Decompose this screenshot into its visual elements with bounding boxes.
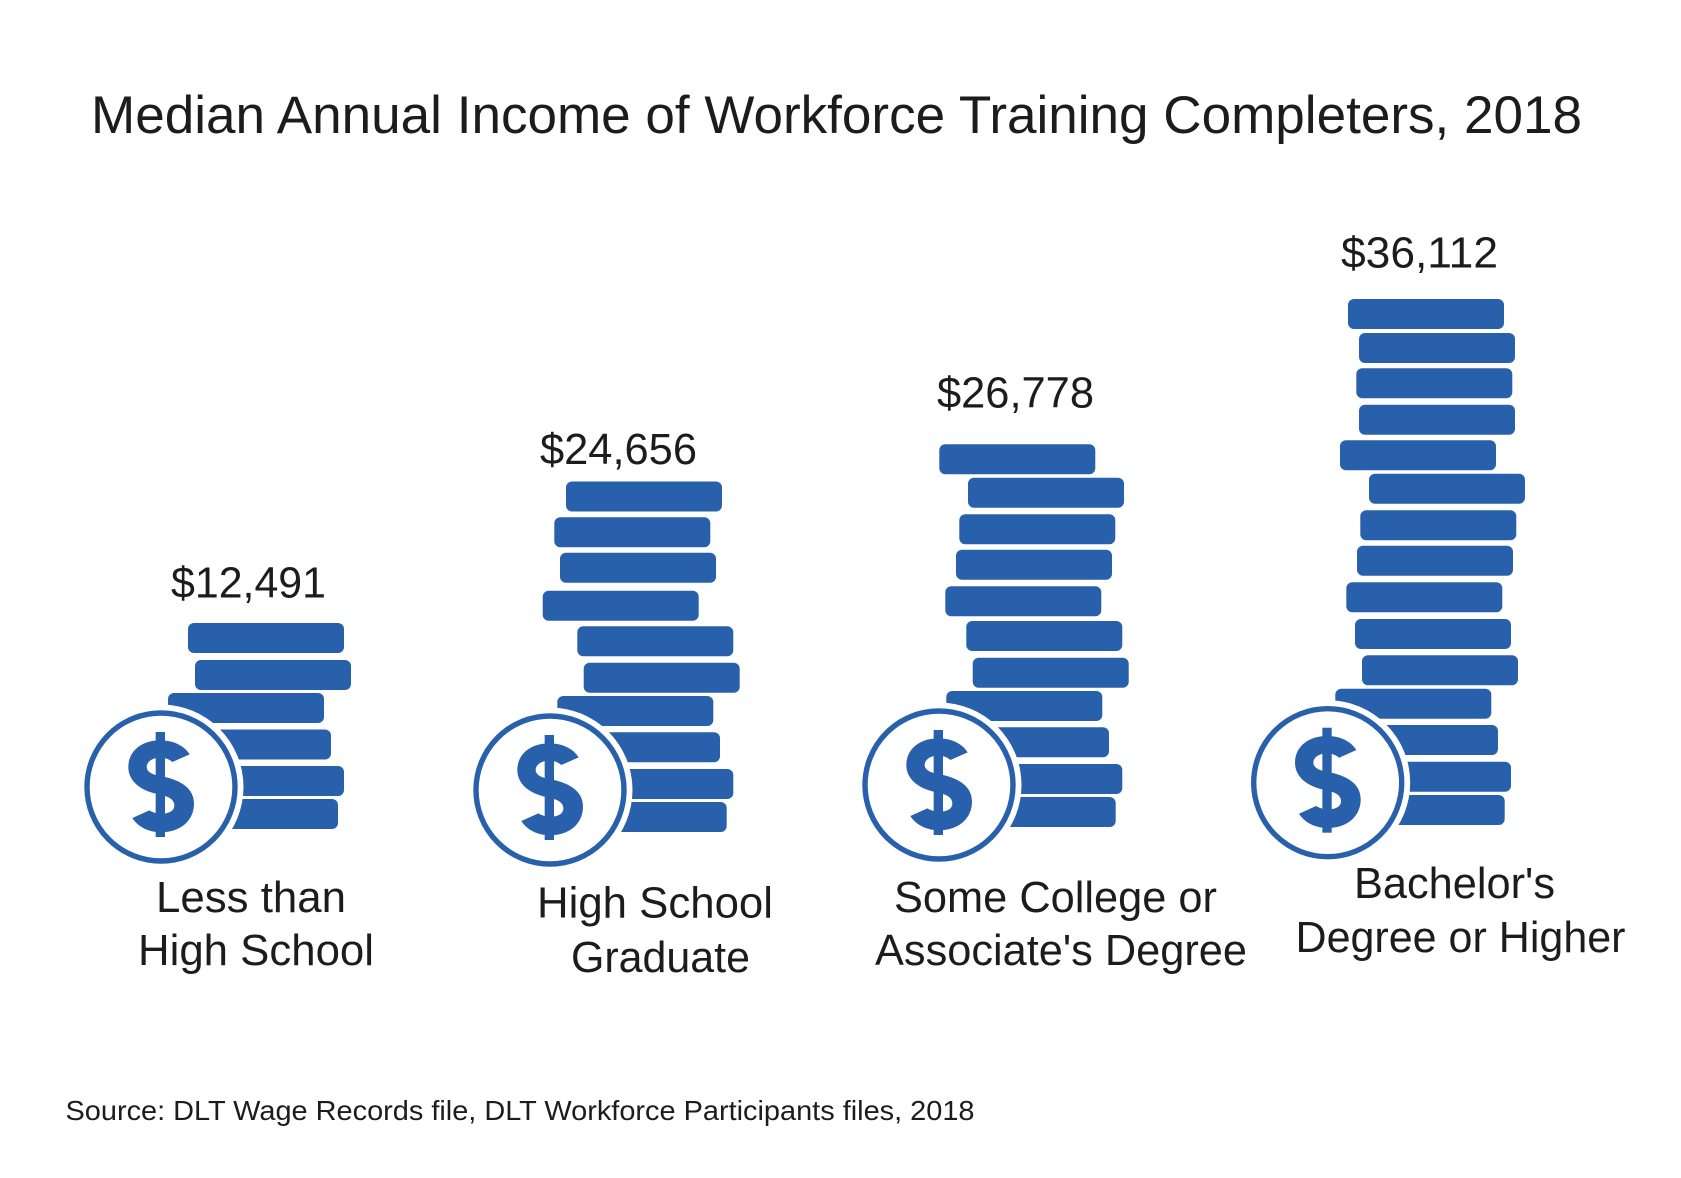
label: some college or associate's degree: Associate's Degree: [875, 926, 1247, 975]
value: $12,491: $12,491: [171, 558, 326, 608]
column: bachelor's degree or higher: [1245, 228, 1626, 962]
value: $26,778: $26,778: [937, 368, 1094, 418]
column: high school graduate: [468, 425, 773, 982]
icon: dollar coin: [856, 702, 1022, 868]
coin stack: [939, 444, 1129, 827]
label: less than high school: Less than: [156, 873, 346, 922]
label: bachelor's degree or higher: Degree or Higher: [1296, 913, 1626, 962]
icon: dollar coin: [78, 704, 244, 870]
label: bachelor's degree or higher: [1296, 859, 1626, 962]
coin stack: [168, 623, 351, 829]
label: high school graduate: High School: [537, 878, 773, 928]
label: bachelor's degree or higher: Bachelor's: [1354, 859, 1555, 908]
label: some college or associate's degree: [875, 873, 1247, 975]
coin stack: [543, 482, 740, 832]
source note: Source: DLT Wage Records file, DLT Workforce Participants files, 2018: [66, 1095, 975, 1126]
icon: dollar coin: [1245, 700, 1410, 865]
value: $24,656: $24,656: [540, 425, 697, 474]
label: high school graduate: Graduate: [571, 933, 750, 982]
label: high school graduate: [537, 878, 773, 982]
title: Median Annual Income of Workforce Training Completers, 2018: [91, 86, 1582, 145]
label: some college or associate's degree: Some College or: [894, 873, 1217, 922]
value: $36,112: $36,112: [1341, 228, 1498, 278]
column: less than high school: [78, 558, 374, 975]
column: some college or associate's degree: [856, 368, 1247, 975]
icon: dollar coin: [468, 708, 632, 872]
label: less than high school: [138, 873, 374, 975]
coin stack: [1335, 299, 1525, 825]
label: less than high school: High School: [138, 926, 374, 975]
